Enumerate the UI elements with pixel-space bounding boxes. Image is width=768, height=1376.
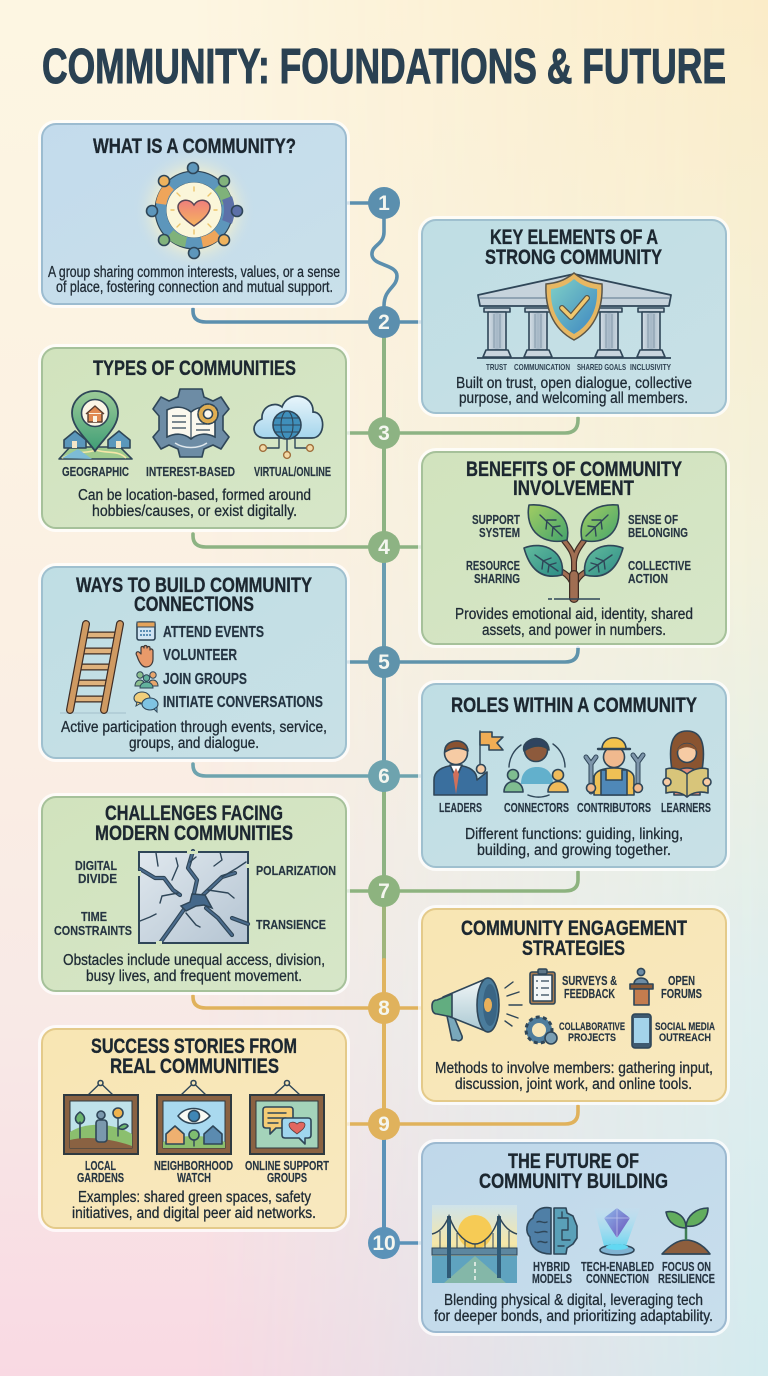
labels: INTEREST-BASED: [146, 465, 235, 479]
description: Methods to involve members: gathering input,: [435, 1060, 713, 1077]
labels: LOCAL: [85, 1159, 116, 1173]
heading: COMMUNITY ENGAGEMENT: [461, 917, 687, 940]
labels: OUTREACH: [659, 1032, 711, 1044]
description: [465, 826, 683, 859]
icon: temple with shield: [477, 273, 671, 358]
labels: CONNECTION: [586, 1272, 649, 1286]
timeline number nodes: 3: [378, 422, 390, 445]
description: purpose, and welcoming all members.: [459, 390, 688, 407]
labels: TRANSIENCE: [256, 918, 326, 932]
timeline number nodes: 5: [378, 651, 390, 674]
heading: [95, 802, 293, 845]
icon: contributor: [586, 738, 643, 795]
labels: FEEDBACK: [564, 987, 615, 1001]
icon: chat bubbles: [134, 692, 158, 712]
description: [72, 1189, 316, 1222]
description: Examples: shared green spaces, safety: [78, 1189, 311, 1206]
description: [78, 487, 311, 520]
description: A group sharing common interests, values, or a sense: [48, 264, 340, 281]
description: Built on trust, open dialogue, collective: [456, 375, 692, 392]
list labels: [163, 624, 323, 711]
icon: megaphone: [432, 978, 522, 1041]
labels: FOCUS ON: [662, 1260, 711, 1274]
list labels: ATTEND EVENTS: [163, 624, 264, 641]
icon: raised hand: [136, 646, 153, 667]
heading: [466, 458, 682, 500]
panel 5: ways to build: [41, 566, 347, 759]
description: initiatives, and digital peer aid networks.: [72, 1205, 316, 1222]
icon: ladder: [60, 624, 126, 713]
timeline spine and connectors: [193, 203, 578, 1243]
list labels: JOIN GROUPS: [163, 671, 247, 688]
heading: STRONG COMMUNITY: [485, 246, 662, 269]
labels: [77, 1159, 329, 1185]
icon: learner: [663, 731, 711, 797]
labels: four pillars: COMMUNICATION: [514, 362, 570, 372]
labels: [532, 1260, 715, 1286]
panel 10: future: [421, 1142, 727, 1333]
labels: LEADERS: [439, 801, 482, 815]
labels: SENSE OF: [628, 513, 678, 527]
description: [456, 375, 692, 407]
labels: PROJECTS: [568, 1032, 616, 1044]
labels: SOCIAL MEDIA: [655, 1021, 715, 1033]
labels: SHARING: [474, 572, 520, 586]
icon: interest gear and book: [153, 389, 229, 457]
labels: GROUPS: [267, 1171, 307, 1185]
labels: TECH-ENABLED: [581, 1260, 654, 1274]
labels: SUPPORT: [472, 513, 520, 527]
labels: [439, 801, 711, 815]
labels: GEOGRAPHIC: [62, 465, 129, 479]
description: busy lives, and frequent movement.: [86, 968, 302, 985]
timeline number nodes: 9: [378, 1113, 390, 1136]
heading: REAL COMMUNITIES: [110, 1055, 279, 1078]
icon: geographic pin: [59, 391, 132, 459]
labels: [62, 465, 331, 479]
icon: phone: [632, 1014, 651, 1048]
description: Active participation through events, service,: [61, 719, 327, 736]
labels: four pillars: TRUST: [486, 362, 508, 372]
description: hobbies/causes, or exist digitally.: [92, 503, 297, 520]
list labels: INITIATE CONVERSATIONS: [163, 694, 323, 711]
icon: holographic tech: [594, 1208, 640, 1255]
icon: support picture: [250, 1080, 324, 1154]
icon: connector: [504, 738, 568, 797]
heading: MODERN COMMUNITIES: [95, 822, 293, 845]
heading: [479, 1150, 668, 1193]
icon: calendar: [137, 622, 155, 640]
heading: CONNECTIONS: [134, 593, 254, 616]
panel 7: challenges: [41, 796, 347, 992]
labels: SURVEYS &: [562, 974, 617, 988]
labels: OPEN: [668, 974, 695, 988]
labels: RESOURCE: [466, 559, 520, 573]
description: [61, 719, 327, 752]
labels: four pillars: [486, 362, 671, 372]
labels: COLLECTIVE: [628, 559, 691, 573]
heading: CHALLENGES FACING: [105, 802, 283, 825]
description: for deeper bonds, and prioritizing adaptability.: [434, 1308, 713, 1325]
icon: neighborhood picture: [157, 1080, 231, 1154]
description: Can be location-based, formed around: [78, 487, 311, 504]
heading: SUCCESS STORIES FROM: [91, 1035, 297, 1058]
labels: DIGITAL: [75, 859, 117, 873]
labels: DIVIDE: [78, 872, 117, 886]
timeline number nodes: 6: [378, 765, 390, 788]
heading: STRATEGIES: [522, 937, 625, 960]
labels: SYSTEM: [479, 526, 520, 540]
labels: GARDENS: [77, 1171, 124, 1185]
icon: group: [135, 672, 158, 688]
description: Obstacles include unequal access, division,: [63, 952, 325, 969]
timeline number nodes: 10: [372, 1232, 396, 1255]
labels: HYBRID: [533, 1260, 570, 1274]
description: discussion, joint work, and online tools.: [455, 1076, 692, 1093]
labels: four pillars: SHARED GOALS: [577, 362, 626, 372]
heading: COMMUNITY BUILDING: [479, 1170, 668, 1193]
heading: [485, 226, 662, 269]
labels: COLLABORATIVE: [559, 1021, 625, 1033]
labels: CONTRIBUTORS: [577, 801, 651, 815]
labels: [559, 974, 715, 1044]
panel 9: success stories: [41, 1028, 347, 1229]
icon: sprout: [662, 1208, 710, 1254]
description: [435, 1060, 713, 1093]
heading: WAYS TO BUILD COMMUNITY: [76, 574, 312, 597]
panel 4: benefits: [421, 451, 727, 645]
icon: virtual cloud and globe: [254, 396, 323, 458]
labels: WATCH: [177, 1171, 211, 1185]
description: [48, 264, 340, 296]
timeline number nodes: 2: [378, 311, 390, 334]
description: [434, 1292, 713, 1325]
labels: NEIGHBORHOOD: [154, 1159, 233, 1173]
panel 2: key elements: [421, 219, 727, 414]
icon: hybrid brain: [527, 1208, 577, 1254]
description: [63, 952, 325, 985]
description: Blending physical & digital, leveraging tech: [444, 1292, 703, 1309]
labels: ONLINE SUPPORT: [245, 1159, 329, 1173]
description: of place, fostering connection and mutual support.: [56, 279, 333, 296]
panel 1: what is a community: [41, 123, 347, 305]
icon: people circle around a heart: [132, 148, 256, 272]
labels: RESILIENCE: [658, 1272, 715, 1286]
heading: ROLES WITHIN A COMMUNITY: [451, 694, 697, 717]
description: [455, 606, 693, 639]
labels: [54, 859, 336, 938]
icon: leader: [434, 731, 503, 795]
labels: [466, 513, 691, 586]
labels: four pillars: INCLUSIVITY: [630, 362, 671, 372]
timeline number nodes: 1: [378, 192, 390, 215]
panel 6: roles: [421, 683, 727, 868]
description: assets, and power in numbers.: [482, 622, 666, 639]
labels: VIRTUAL/ONLINE: [254, 465, 331, 479]
heading: INVOLVEMENT: [513, 477, 634, 500]
list labels: VOLUNTEER: [163, 647, 237, 664]
icon: cracked ground: [136, 851, 250, 945]
heading: TYPES OF COMMUNITIES: [93, 357, 296, 380]
labels: BELONGING: [628, 526, 688, 540]
heading: BENEFITS OF COMMUNITY: [466, 458, 682, 481]
description: building, and growing together.: [477, 842, 671, 859]
timeline number nodes: 8: [378, 997, 390, 1020]
labels: CONNECTORS: [504, 801, 569, 815]
icon: podium: [630, 968, 653, 1005]
labels: POLARIZATION: [256, 864, 336, 878]
icon: clipboard: [530, 969, 555, 1004]
description: Different functions: guiding, linking,: [465, 826, 683, 843]
heading: THE FUTURE OF: [508, 1150, 639, 1173]
panel 8: engagement strategies: [421, 908, 727, 1102]
description: groups, and dialogue.: [129, 735, 259, 752]
timeline number nodes: [368, 187, 400, 1259]
heading: [461, 917, 687, 960]
icon: bridge at sunrise: [432, 1205, 517, 1283]
icon: garden picture: [64, 1080, 138, 1154]
heading: [91, 1035, 297, 1078]
icon: collaborative gears: [526, 1017, 557, 1044]
labels: LEARNERS: [661, 801, 711, 815]
labels: MODELS: [532, 1272, 572, 1286]
labels: FORUMS: [661, 987, 702, 1001]
timeline number nodes: 4: [378, 536, 390, 559]
labels: ACTION: [628, 572, 668, 586]
description: Provides emotional aid, identity, shared: [455, 606, 693, 623]
panel 3: types of communities: [41, 347, 347, 529]
timeline number nodes: 7: [378, 880, 390, 903]
heading: WHAT IS A COMMUNITY?: [93, 135, 296, 158]
labels: CONSTRAINTS: [54, 924, 132, 938]
heading: [76, 574, 312, 616]
heading: KEY ELEMENTS OF A: [490, 226, 658, 249]
icon: tree with four leaves: [524, 505, 623, 599]
labels: TIME: [81, 910, 107, 924]
